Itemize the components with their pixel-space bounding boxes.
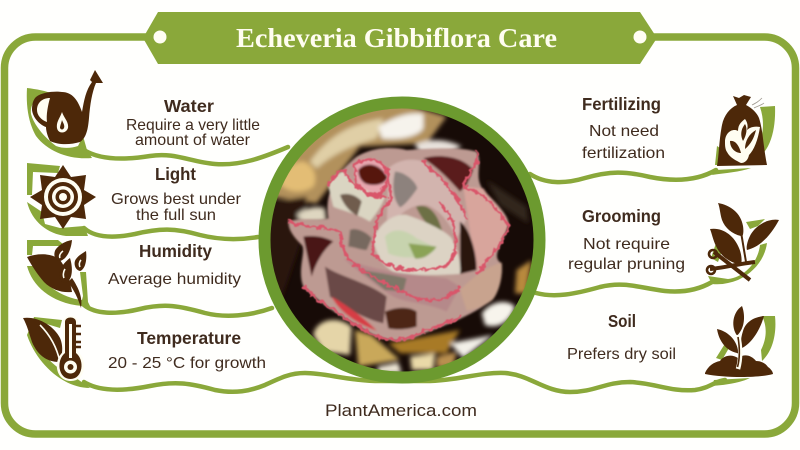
icon: watering can — [27, 70, 103, 158]
text: water description — [126, 117, 260, 149]
title banner — [143, 12, 657, 64]
icon: leaves and pruning shears — [707, 203, 779, 284]
vines — [84, 147, 725, 392]
title: Echeveria Gibbiflora Care — [236, 23, 557, 53]
text: light description: Grows best under — [111, 191, 242, 208]
text: grooming description: regular pruning — [568, 256, 685, 273]
text: soil description: Prefers dry soil — [567, 346, 676, 363]
heading: water: Water — [164, 96, 214, 116]
photo: succulent rosette — [288, 148, 508, 341]
heading: temperature: Temperature — [137, 328, 241, 348]
icon: sprout in soil — [705, 306, 775, 386]
photo: ruffled petal edges — [288, 152, 508, 340]
panel: grooming — [568, 203, 779, 284]
text: fertilizing description: fertilization — [582, 145, 665, 162]
text: light description: the full sun — [136, 207, 216, 224]
icon: leaves and droplets — [27, 240, 92, 310]
heading: light: Light — [155, 164, 196, 184]
text: water description: Require a very little — [126, 117, 260, 134]
icon: sun — [27, 163, 96, 236]
text: fertilizing description — [582, 123, 665, 162]
icon: thermometer and leaf — [23, 316, 90, 388]
photo background: pebbles and soil — [265, 103, 532, 373]
text: humidity description: Average humidity — [108, 271, 241, 288]
text: fertilizing description: Not need — [589, 123, 659, 140]
panel: soil — [567, 306, 775, 386]
text: grooming description: Not require — [583, 236, 670, 253]
panel: temperature — [23, 316, 266, 388]
panel: humidity — [27, 240, 241, 310]
heading: fertilizing: Fertilizing — [582, 94, 661, 114]
text: temperature description: 20 - 25 °C for growth — [108, 355, 266, 372]
text: water description: amount of water — [135, 132, 251, 149]
heading: humidity: Humidity — [139, 241, 212, 261]
text: light description — [111, 191, 242, 224]
central photo — [264, 102, 540, 378]
heading: grooming: Grooming — [582, 206, 661, 226]
panel: water — [27, 70, 260, 158]
panel: fertilizing — [582, 94, 775, 175]
icon: fertilizer bag — [712, 95, 775, 175]
heading: soil: Soil — [608, 311, 636, 331]
panel: light — [27, 163, 242, 236]
website credit: PlantAmerica.com — [325, 401, 477, 420]
text: grooming description — [568, 236, 685, 273]
